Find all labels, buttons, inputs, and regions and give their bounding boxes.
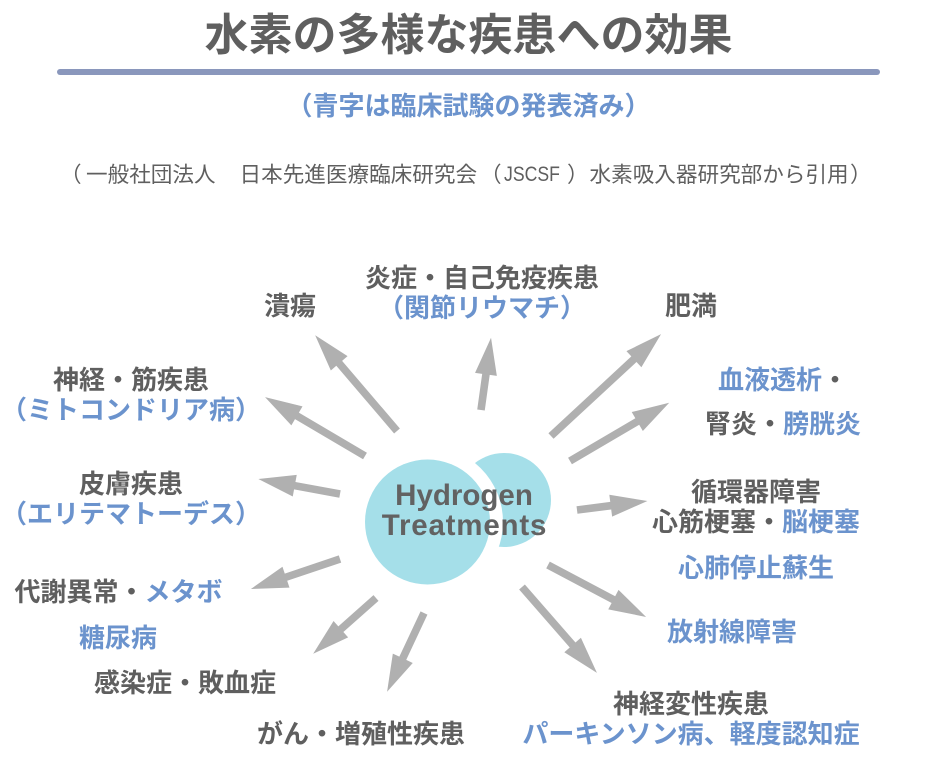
arrow to inflammation	[470, 336, 502, 412]
center label	[382, 479, 547, 542]
subtitle: blue text note: （青字は臨床試験の発表済み）	[286, 91, 651, 121]
source note: 日本先進医療臨床研究会	[240, 162, 477, 187]
arrow to metabolic	[247, 549, 344, 599]
label: Parkinson and MCI: パーキンソン病、軽度認知症	[522, 719, 860, 749]
source note: 水素吸入器研究部から引用	[590, 162, 849, 187]
label: infection and sepsis: 感染症・敗血症	[94, 668, 276, 698]
source note: ）	[850, 162, 872, 187]
title rule	[57, 69, 880, 75]
label: lupus: （エリテマトーデス）	[1, 499, 261, 529]
arrow to obesity	[544, 326, 669, 444]
source note: 一般社団法人	[86, 162, 216, 187]
label: dialysis: 血液透析・	[718, 365, 848, 395]
label: metabolic disorder: 代謝異常・メタボ	[14, 577, 223, 607]
label: circulatory disorder: 循環器障害	[691, 477, 821, 507]
arrow to kidney	[564, 393, 675, 470]
arrow to nerve and muscle	[259, 388, 371, 465]
label: neurodegenerative disease: 神経変性疾患	[613, 689, 769, 719]
label: nephritis and cystitis: 腎炎・膀胱炎	[705, 409, 861, 439]
arrow to cancer	[377, 608, 434, 696]
label: inflammation: 炎症・自己免疫疾患	[365, 263, 599, 293]
center label: Hydrogen	[395, 479, 533, 512]
icon: large circle	[365, 460, 490, 584]
source note: （	[480, 162, 502, 187]
title: 水素の多様な疾患への効果	[204, 11, 732, 60]
arrow to radiation	[543, 555, 651, 627]
label: cancer: がん・増殖性疾患	[257, 719, 465, 749]
arrow to circulatory	[576, 490, 649, 521]
arrow to neurodegenerative	[514, 580, 605, 680]
label: mitochondrial disease: （ミトコンドリア病）	[1, 395, 261, 425]
source note: （	[60, 162, 82, 187]
label: radiation injury: 放射線障害	[667, 617, 797, 647]
label: cardiopulmonary resuscitation: 心肺停止蘇生	[678, 553, 834, 583]
source note: JSCSF	[504, 163, 560, 186]
label: ulcer: 潰瘍	[264, 291, 316, 321]
arrow to infection	[306, 590, 383, 662]
label: infarction: 心筋梗塞・脳梗塞	[652, 507, 860, 537]
label: nerve and muscle disease: 神経・筋疾患	[53, 365, 209, 395]
label: obesity: 肥満	[665, 291, 717, 321]
center label: Treatments	[382, 509, 547, 542]
arrow to skin	[256, 468, 342, 505]
source note	[60, 162, 872, 187]
arrow to ulcer	[307, 328, 405, 438]
icon: small crescent circle	[351, 446, 551, 598]
label: skin disease: 皮膚疾患	[79, 469, 183, 499]
label: diabetes: 糖尿病	[79, 623, 157, 653]
source note: ）	[567, 162, 589, 187]
label: rheumatism: （関節リウマチ）	[378, 293, 586, 323]
